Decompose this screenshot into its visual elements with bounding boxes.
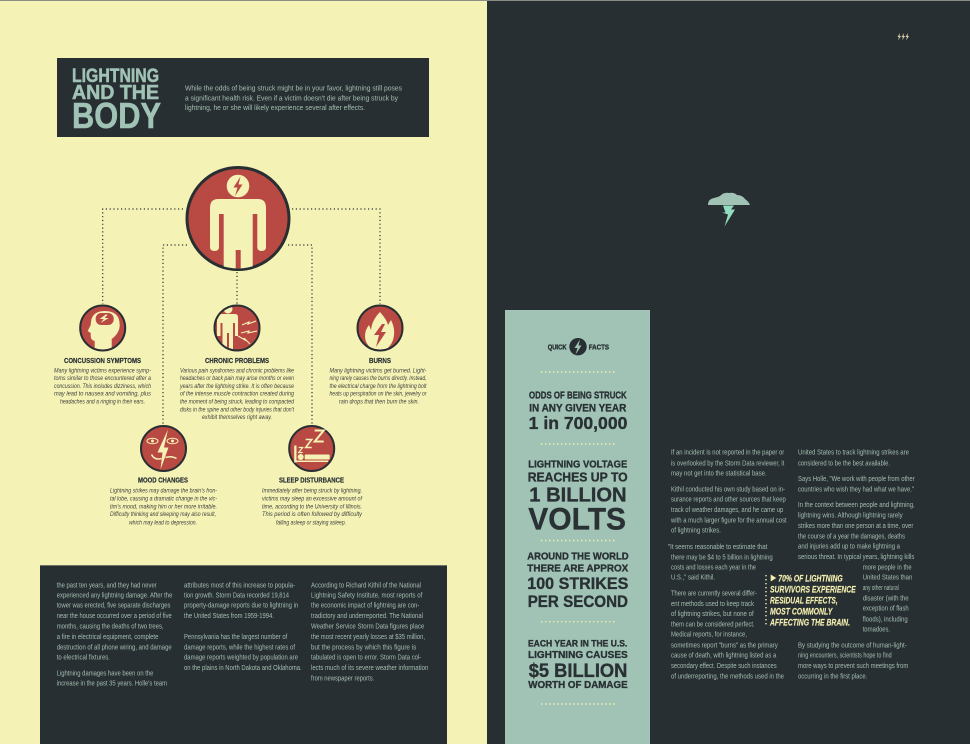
fact: lightning voltage: VOLTS xyxy=(528,500,626,536)
article column 2: damage reports, while the highest rates of xyxy=(184,644,295,651)
article column left: sometimes report "burns" as the primary xyxy=(671,642,778,649)
text: burns: heats up perspiration on the skin, jewelry or xyxy=(330,391,427,398)
article column 1: to electrical fixtures. xyxy=(57,655,110,662)
article column right: serious threat. In typical years, lightning kills xyxy=(798,554,915,561)
fact: strikes per second: AROUND THE WORLD xyxy=(527,551,629,562)
article column 3: from newspaper reports. xyxy=(311,675,374,682)
article column right: United States than xyxy=(863,575,912,582)
text: burns: Many lightning victims get burned. Light- xyxy=(330,368,426,374)
article column right: strikes more than one person at a time, over xyxy=(798,523,914,530)
article column 3 xyxy=(311,582,428,682)
article column 3: Weather Service Storm Data figures place xyxy=(311,623,424,630)
callout: residual effects: RESIDUAL EFFECTS, xyxy=(770,595,838,605)
article column left: of underreporting, the methods used in the xyxy=(671,673,784,680)
icon: storm cloud xyxy=(708,193,750,226)
article column left: them can be considered perfect. xyxy=(671,621,755,628)
title: AND THE xyxy=(72,81,159,104)
text: chronic problems: Various pain syndromes and chronic problems like xyxy=(180,368,294,374)
intro text: a significant health risk. Even if a victim doesn't die after being struck by xyxy=(185,93,398,102)
article column right: floods), including xyxy=(863,616,908,623)
article column right: tornadoes. xyxy=(863,626,890,633)
icon: burns xyxy=(358,306,402,350)
article column 3: According to Richard Kithil of the National xyxy=(311,582,421,589)
callout: residual effects: AFFECTING THE BRAIN. xyxy=(769,618,850,628)
article column left: costs and losses each year in the xyxy=(671,564,756,571)
fact: cost of damage: LIGHTNING CAUSES xyxy=(528,649,628,661)
article column 3: but the process by which this figure is xyxy=(311,644,417,651)
intro text xyxy=(185,84,402,112)
text: burns: rain drops that then burn the skin. xyxy=(339,398,419,406)
article column 2: damage reports weighted by population are xyxy=(184,655,298,662)
icon: concussion xyxy=(80,306,125,352)
fact: strikes per second: 100 STRIKES xyxy=(527,574,628,593)
article column left: is overlooked by the Storm Data reviewer, it xyxy=(671,460,784,467)
article column left: ent methods used to keep track xyxy=(671,601,754,608)
quick facts header: FACTS xyxy=(589,342,609,352)
text: concussion symptoms xyxy=(54,368,152,406)
article column left: Medical reports, for instance, xyxy=(671,632,747,639)
article column right: the course of a year the damages, deaths xyxy=(798,533,905,540)
text: mood changes: tim's mood, making him or her more irritable. xyxy=(110,503,217,510)
article column left: there may be $4 to 5 billion in lightning xyxy=(671,554,773,561)
article column 2: property-damage reports due to lightning in xyxy=(184,603,298,610)
article column 2 xyxy=(184,582,302,672)
text: sleep disturbance: victims may sleep an excessive amount of xyxy=(262,496,363,503)
fact: lightning voltage: REACHES UP TO xyxy=(528,471,628,485)
article column 2: on the plains in North Dakota and Oklahoma. xyxy=(184,665,302,672)
quick facts header xyxy=(548,338,609,355)
text: mood changes: Lightning strikes may damage the brain's fron- xyxy=(110,488,217,495)
intro text: lightning, he or she will likely experience several after effects. xyxy=(185,103,365,112)
title xyxy=(72,65,161,136)
article column left: track of weather damages, and he came up xyxy=(671,507,783,514)
article column right: occurring in the first place. xyxy=(798,673,867,680)
article column 3: Lightning Safety Institute, most reports of xyxy=(311,593,422,600)
text: concussion symptoms: Many lightning victims experience symp- xyxy=(54,368,151,374)
text: chronic problems xyxy=(179,368,294,421)
article column 3: tabulated is open to error. Storm Data col- xyxy=(311,655,422,662)
callout: residual effects: MOST COMMONLY xyxy=(770,607,833,617)
icon: central body figure xyxy=(187,168,289,275)
text: concussion symptoms: concussion. This includes dizziness, which xyxy=(54,383,151,390)
title panel xyxy=(57,58,429,137)
article column right: more ways to prevent such meetings from xyxy=(798,663,908,670)
fact: cost of damage: WORTH OF DAMAGE xyxy=(528,679,628,691)
article column right: disaster (with the xyxy=(863,595,909,602)
article column left xyxy=(668,450,787,680)
article column right: lightning wins. Although lightning rarely xyxy=(798,513,903,520)
article column right: exception of flash xyxy=(863,606,909,613)
connector lines xyxy=(103,209,380,424)
text: chronic problems: of the intense muscle contraction created during xyxy=(180,391,294,398)
quick facts header: QUICK xyxy=(548,342,567,352)
article column 1: experienced any lightning damage. After the xyxy=(57,593,172,600)
text: chronic problems: disks in the spine and other body injuries that don't xyxy=(180,406,294,413)
text: mood changes: Difficulty thinking and sleeping may also result, xyxy=(110,511,216,518)
article column 1: Lightning damages have been on the xyxy=(57,670,153,677)
article column left: of lightning strikes, but none of xyxy=(671,611,754,618)
fact: lightning voltage: 1 BILLION xyxy=(529,483,627,506)
article column right: and injuries add up to make lightning a xyxy=(798,544,900,551)
icon: sleep disturbance xyxy=(289,426,334,471)
article column 3: the economic impact of lightning are con- xyxy=(311,603,420,610)
article column 1: the past ten years, and they had never xyxy=(57,582,157,589)
article column 1: destruction of all phone wiring, and damage xyxy=(57,644,172,651)
article column right: In the context between people and lightning, xyxy=(798,502,915,509)
article column 1 xyxy=(57,582,172,688)
text: concussion symptoms: toms similar to those encountered after a xyxy=(54,375,151,382)
fact: odds of being struck: ODDS OF BEING STRUCK xyxy=(529,391,627,402)
fact: strikes per second xyxy=(527,551,629,611)
article column right: any other natural xyxy=(863,585,899,592)
article column 3: lects much of its severe weather information xyxy=(311,665,428,672)
article column left: cause of death, with lightning listed as a xyxy=(671,653,776,660)
text: sleep disturbance xyxy=(262,488,363,526)
callout: residual effects: SURVIVORS EXPERIENCE xyxy=(770,584,856,594)
panel: quick facts xyxy=(505,310,650,744)
heading: burns: BURNS xyxy=(369,356,391,365)
text: sleep disturbance: time, according to the University of Illinois. xyxy=(262,503,362,510)
fact: lightning voltage: LIGHTNING VOLTAGE xyxy=(528,460,627,471)
article column left: Kithil conducted his own study based on in- xyxy=(671,487,786,494)
article column right: ning encounters, scientists hope to find xyxy=(798,653,892,660)
text: mood changes xyxy=(110,488,217,526)
fact: odds of being struck: IN ANY GIVEN YEAR xyxy=(529,403,626,415)
article column right: considered to be the best available. xyxy=(798,460,890,467)
article column 2: the United States from 1959-1994. xyxy=(184,613,274,620)
panel: article continued xyxy=(40,565,447,744)
article column left: may not get into the statistical base. xyxy=(671,471,767,478)
text: burns: ning rarely causes the burns directly. Instead, xyxy=(330,375,427,382)
text: chronic problems: exhibit themselves right away. xyxy=(202,414,272,421)
text: burns xyxy=(330,368,427,406)
article column 1: near the house occurred over a period of five xyxy=(57,613,172,620)
article column left: surance reports and other sources that keep xyxy=(671,497,786,504)
text: mood changes: tal lobe, causing a dramatic change in the vic- xyxy=(110,496,217,503)
callout: residual effects xyxy=(766,573,856,628)
text: concussion symptoms: may lead to nausea and vomiting, plus xyxy=(54,391,152,398)
heading: sleep disturbance: SLEEP DISTURBANCE xyxy=(279,476,344,484)
article column 1: months, causing the deaths of two trees, xyxy=(57,623,164,630)
fact: odds of being struck: 1 in 700,000 xyxy=(529,413,628,433)
title: BODY xyxy=(72,95,161,136)
article column 3: the most recent yearly losses at $35 million, xyxy=(311,634,425,641)
article column left: with a much larger figure for the annual cost xyxy=(670,517,787,524)
fact: odds of being struck xyxy=(529,391,628,433)
article column right: By studying the outcome of human-light- xyxy=(798,642,907,649)
article column right: countries who wish they had what we have." xyxy=(798,486,914,493)
fact: strikes per second: PER SECOND xyxy=(528,592,628,611)
intro text: While the odds of being struck might be in your favor, lightning still poses xyxy=(185,84,402,92)
article column 2: tion growth. Storm Data recorded 19,814 xyxy=(184,593,289,600)
text: chronic problems: the moment of being struck, leading to compacted xyxy=(180,398,294,406)
article column right xyxy=(798,450,915,680)
text: mood changes: which may lead to depression. xyxy=(129,520,197,526)
callout: residual effects: 70% OF LIGHTNING xyxy=(778,573,843,583)
article column right: more people in the xyxy=(863,564,912,571)
article column 2: attributes most of this increase to popula- xyxy=(184,582,296,589)
article column 2: Pennsylvania has the largest number of xyxy=(184,634,287,641)
article column left: If an incident is not reported in the paper or xyxy=(671,450,785,457)
article column left: U.S.," said Kithil. xyxy=(671,575,715,582)
article column 1: tower was erected, five separate discharges xyxy=(57,603,171,610)
article column 1: a fire in electrical equipment, complete xyxy=(57,634,158,641)
article column right: United States to track lightning strikes are xyxy=(798,450,909,457)
text: burns: the electrical charge from the lightning bolt xyxy=(330,383,427,390)
icon: small bolts xyxy=(898,33,909,40)
text: concussion symptoms: headaches and a ringing in their ears. xyxy=(60,398,145,406)
icon: mood changes xyxy=(141,426,186,471)
article column 3: tradictory and underreported. The National xyxy=(311,613,423,620)
title: LIGHTNING xyxy=(72,65,159,87)
article column right: Says Holle, "We work with people from other xyxy=(798,476,915,483)
heading: concussion symptoms: CONCUSSION SYMPTOMS xyxy=(64,356,141,365)
article column left: There are currently several differ- xyxy=(671,591,758,598)
heading: chronic problems: CHRONIC PROBLEMS xyxy=(205,356,269,365)
fact: cost of damage: EACH YEAR IN THE U.S. xyxy=(528,638,627,648)
text: chronic problems: headaches or back pain may arise months or even xyxy=(180,375,294,382)
article column 1: increase in the past 35 years. Holle's team xyxy=(57,681,167,688)
fact: cost of damage xyxy=(528,638,628,691)
text: sleep disturbance: Immediately after being struck by lightning, xyxy=(262,488,362,495)
fact: strikes per second: THERE ARE APPROX xyxy=(527,564,629,575)
text: sleep disturbance: This period is often followed by difficulty xyxy=(262,511,363,518)
article column left: "It seems reasonable to estimate that xyxy=(668,544,767,551)
article column left: of lightning strikes. xyxy=(671,528,721,535)
icon: chronic problems xyxy=(214,304,260,353)
fact: lightning voltage xyxy=(528,460,628,536)
text: sleep disturbance: falling asleep or staying asleep. xyxy=(276,520,346,526)
fact: cost of damage: $5 BILLION xyxy=(529,660,627,682)
article column left: secondary effect. Despite such instances xyxy=(671,663,777,670)
text: chronic problems: years after the lightning strike. It is often because xyxy=(179,383,294,390)
heading: mood changes: MOOD CHANGES xyxy=(138,476,188,484)
